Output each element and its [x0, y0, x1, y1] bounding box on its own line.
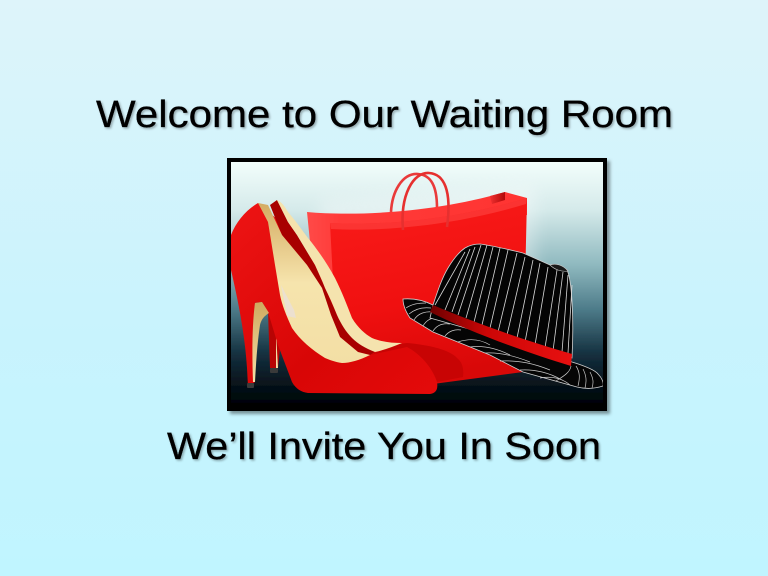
front shoe lining — [258, 203, 370, 363]
bag top highlight — [330, 198, 527, 230]
picture: shoes, bag and hat — [229, 160, 605, 409]
front heel lining — [252, 302, 269, 382]
crown pinch — [550, 264, 568, 271]
hat crown — [430, 244, 573, 358]
title: Welcome to Our Waiting Room — [96, 94, 673, 136]
bag side flap — [490, 192, 505, 204]
hat brim — [403, 299, 603, 388]
rear heel — [268, 314, 280, 368]
rear bag handle — [391, 174, 437, 212]
hat band — [430, 305, 572, 366]
crown pinstripes — [435, 245, 572, 353]
icon: red high heels — [231, 200, 463, 394]
front bag handle — [403, 173, 448, 230]
front shoe body — [231, 203, 437, 394]
glow behind bag — [322, 192, 540, 260]
back shoe collar — [270, 200, 375, 355]
lining highlight — [281, 285, 296, 318]
heel tips — [247, 368, 278, 388]
picture frame — [229, 160, 605, 409]
brim stripes — [406, 303, 593, 388]
subtitle: We’ll Invite You In Soon — [167, 426, 601, 468]
rear heel lining — [276, 338, 278, 368]
back shoe toe — [370, 343, 463, 382]
icon: shopping bag — [307, 173, 527, 390]
bag front panel — [330, 198, 527, 390]
bag back panel — [307, 192, 527, 282]
icon: pinstriped hat — [403, 244, 603, 388]
back shoe lining — [277, 200, 402, 352]
